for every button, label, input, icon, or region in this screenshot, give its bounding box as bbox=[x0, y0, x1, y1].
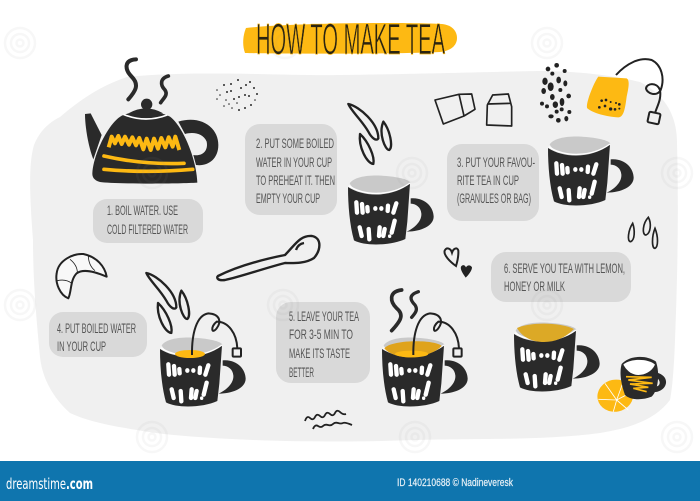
step 6 card bbox=[491, 252, 631, 302]
footer logo: dreamstime.com bbox=[6, 475, 93, 493]
step 3 card: RITE TEA IN CUP bbox=[457, 172, 519, 188]
step 1 card bbox=[93, 199, 203, 243]
text: HOW TO MAKE TEA bbox=[256, 15, 445, 64]
milk jug bbox=[621, 357, 666, 399]
hearts bbox=[444, 248, 472, 278]
step 4 card: 4. PUT BOILED WATER bbox=[57, 320, 136, 336]
footer credit: ID 140210688 © Nadineveresk bbox=[397, 477, 513, 489]
title bbox=[243, 15, 457, 64]
tea bag bbox=[587, 59, 663, 124]
step 5 card: FOR 3-5 MIN TO bbox=[289, 326, 353, 342]
footer bar bbox=[0, 461, 700, 501]
step 4 card: IN YOUR CUP bbox=[57, 338, 106, 354]
step 5 card bbox=[276, 302, 370, 383]
step 3 card bbox=[447, 144, 539, 221]
cup with tea bag, step 4 bbox=[160, 313, 246, 406]
step 2 card: EMPTY YOUR CUP bbox=[256, 190, 320, 206]
squiggle bbox=[305, 411, 352, 429]
step 3 card: (GRANULES OR BAG) bbox=[457, 190, 531, 206]
step 3 card: 3. PUT YOUR FAVOU- bbox=[457, 154, 535, 170]
background blob bbox=[30, 71, 678, 442]
cup, step 3 bbox=[548, 137, 634, 205]
tea leaves dots bbox=[540, 63, 571, 123]
step 5 card: 5. LEAVE YOUR TEA bbox=[289, 308, 359, 324]
croissant bbox=[56, 254, 107, 298]
drops above cup, step 4 bbox=[146, 273, 189, 333]
step 2 card: TO PREHEAT IT. THEN bbox=[256, 172, 335, 188]
small drops at right bbox=[628, 217, 657, 248]
step 2 card: 2. PUT SOME BOILED bbox=[256, 135, 334, 151]
teapot illustration bbox=[85, 59, 218, 184]
step 2 card: WATER IN YOUR CUP bbox=[256, 154, 332, 170]
title highlight bar bbox=[243, 23, 457, 54]
step 2 card bbox=[245, 124, 337, 215]
step 5 card: BETTER bbox=[289, 364, 314, 380]
drops above cup, step 2 bbox=[348, 104, 391, 164]
step 1 card: COLD FILTERED WATER bbox=[107, 221, 188, 237]
sugar cube and carton icons bbox=[435, 94, 512, 126]
cup, step 2 bbox=[348, 176, 434, 244]
step 5 card: MAKE ITS TASTE bbox=[289, 345, 350, 361]
step 1 card: 1. BOIL WATER. USE bbox=[107, 202, 178, 218]
step 6 card: HONEY OR MILK bbox=[504, 278, 565, 294]
spoon bbox=[217, 236, 319, 280]
cup with tea, step 6 bbox=[514, 323, 600, 391]
cup with steam and tea bag, step 5 bbox=[382, 290, 468, 406]
lemon slice bbox=[594, 376, 636, 415]
stippled dots bbox=[216, 79, 258, 111]
step 4 card bbox=[49, 312, 147, 357]
